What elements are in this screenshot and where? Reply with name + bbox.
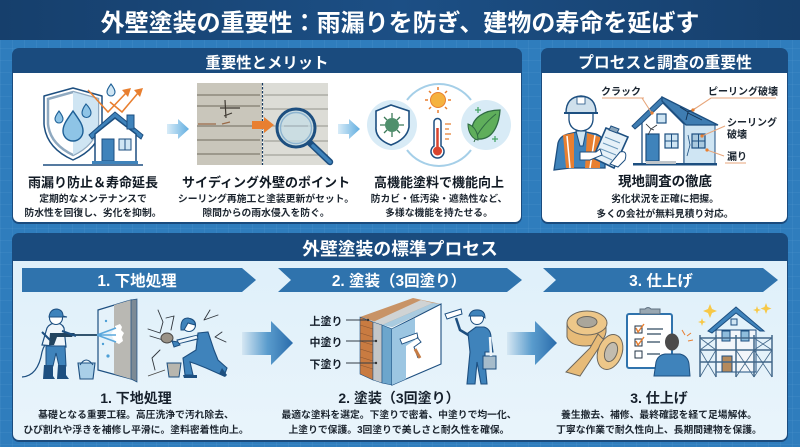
heading: standard process: 外壁塗装の標準プロセス	[302, 238, 498, 259]
text: siding points	[178, 175, 354, 219]
text: step 2: 2. 塗装（3回塗り）	[338, 390, 460, 406]
icon: crack repair worker	[148, 310, 227, 378]
arrow: process step 1 to 2	[242, 321, 293, 365]
icon: finished house with scaffolding	[698, 303, 772, 377]
text: step 3: 丁寧な作業で耐久性向上、長期間建物を保護。	[556, 423, 762, 436]
text: step 1: 1. 下地処理	[100, 390, 172, 406]
panel: importance and merits	[12, 48, 522, 224]
text: leak prevention	[24, 175, 162, 219]
step banner 1: 1. 下地処理	[97, 272, 177, 290]
text: step 2: 最適な塗料を選定。下塗りで密着、中塗りで均一化、	[281, 408, 517, 421]
text: on-site survey	[596, 173, 734, 220]
text: high function paint: 多様な機能を持たせる。	[385, 206, 493, 219]
callout labels: defects: シーリング	[727, 116, 777, 129]
text: step 3	[556, 390, 762, 436]
labels: paint layers: 下塗り	[310, 357, 342, 371]
step banner 3: 3. 仕上げ	[629, 272, 693, 290]
text: high function paint	[371, 175, 507, 219]
panel: standard process	[12, 233, 788, 442]
text: siding points: シーリング再施工と塗装更新がセット。	[178, 192, 354, 205]
callout labels: defects: 破壊	[727, 128, 747, 141]
icon: painter with roller	[445, 309, 496, 384]
callout labels: defects: ピーリング破壊	[708, 85, 778, 98]
text: on-site survey: 多くの会社が無料見積り対応。	[596, 207, 734, 220]
panel: process and survey	[541, 48, 788, 224]
step banner 2: 2. 塗装（3回塗り）	[332, 272, 466, 290]
icon: high function paint	[367, 84, 511, 166]
text: step 1: ひび割れや浮きを補修し平滑に。塗料密着性向上。	[23, 423, 249, 436]
title banner: 外壁塗装の重要性：雨漏りを防ぎ、建物の寿命を延ばす	[101, 9, 699, 37]
icon: masking tape rolls	[566, 311, 627, 376]
step banner 3	[543, 268, 778, 292]
text: high function paint: 防カビ・低汚染・遮熱性など、	[371, 192, 507, 205]
title banner	[0, 0, 800, 40]
text: leak prevention: 防水性を回復し、劣化を抑制。	[24, 206, 162, 219]
icon: house with defects	[602, 97, 776, 166]
text: on-site survey: 劣化状況を正確に把握。	[611, 192, 719, 205]
callout labels: defects: 漏り	[727, 150, 747, 163]
callout labels: defects: クラック	[601, 86, 641, 98]
text: step 1: 基礎となる重要工程。高圧洗浄で汚れ除去、	[38, 408, 234, 421]
callout labels: defects	[601, 85, 778, 163]
heading: process and survey: プロセスと調査の重要性	[578, 53, 752, 72]
icon: shield and house	[43, 84, 143, 165]
text: step 1	[23, 390, 249, 436]
text: high function paint: 高機能塗料で機能向上	[374, 175, 504, 190]
icon: three-layer wall diagram	[346, 298, 441, 385]
text: leak prevention: 雨漏り防止＆寿命延長	[28, 175, 158, 190]
labels: paint layers: 上塗り	[310, 314, 342, 328]
text: step 2: 上塗りで保護。3回塗りで美しさと耐久性を確保。	[289, 423, 509, 436]
arrow: step two to three	[338, 119, 360, 139]
labels: paint layers	[310, 314, 342, 371]
text: leak prevention: 定期的なメンテナンスで	[39, 192, 147, 205]
icon: checklist and inspector	[627, 308, 693, 376]
text: step 3: 3. 仕上げ	[630, 390, 688, 406]
heading: importance and merits: 重要性とメリット	[205, 53, 329, 72]
icon: inspector with clipboard	[554, 96, 628, 170]
text: siding points: サイディング外壁のポイント	[182, 175, 350, 190]
step banner 1	[22, 268, 256, 292]
text: on-site survey: 現地調査の徹底	[618, 173, 712, 189]
text: siding points: 隙間からの雨水侵入を防ぐ。	[202, 206, 330, 219]
labels: paint layers: 中塗り	[310, 335, 342, 349]
arrow: step one to two	[167, 119, 189, 139]
arrow: process step 2 to 3	[507, 321, 557, 365]
text: step 3: 養生撤去、補修、最終確認を経て足場解体。	[561, 408, 757, 421]
step banner 2	[278, 268, 522, 292]
image: siding wall with magnifier	[197, 83, 330, 165]
icon: pressure washing worker	[22, 299, 137, 382]
text: step 2	[281, 390, 517, 436]
